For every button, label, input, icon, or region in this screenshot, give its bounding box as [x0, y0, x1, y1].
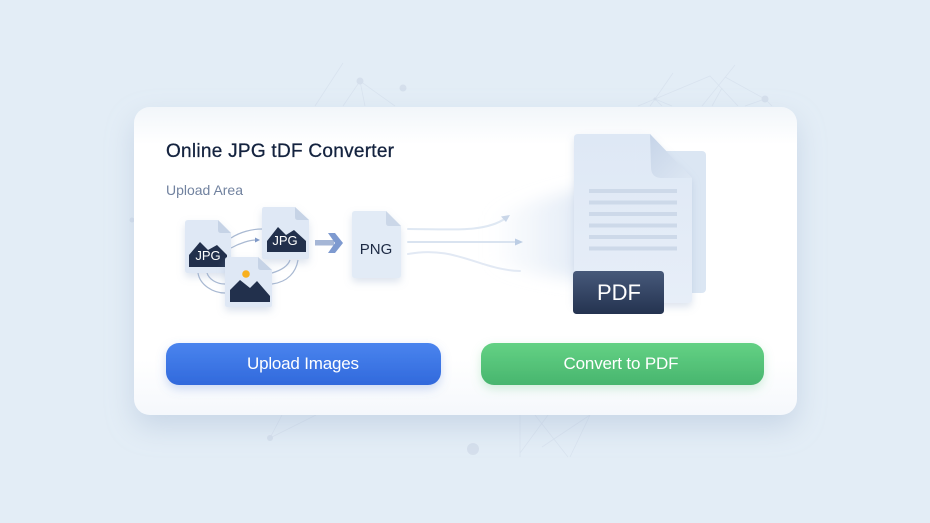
icon: PNG file [352, 211, 401, 278]
button: convert to PDF: Convert to PDF [564, 354, 678, 373]
button: upload images [166, 343, 441, 385]
front page [574, 134, 692, 303]
back page [600, 151, 706, 293]
glow beam [490, 188, 590, 280]
PDF badge [573, 271, 664, 314]
icon: JPG file right [262, 207, 309, 259]
title: Online JPG tDF Converter [166, 141, 395, 162]
icon: JPG file left [185, 220, 231, 273]
text lines [589, 189, 677, 250]
panel: converter card [134, 107, 797, 415]
icon: PDF document [573, 134, 706, 314]
network background [130, 63, 772, 457]
icon: JPG file left: JPG [195, 248, 221, 263]
icon: JPG file right: JPG [272, 233, 298, 248]
upload area label: Upload Area [166, 182, 243, 198]
button: upload images: Upload Images [247, 354, 359, 373]
page fold [650, 134, 692, 178]
flow arrows [408, 215, 523, 271]
icon: PNG file: PNG [360, 241, 392, 258]
button: convert to PDF [481, 343, 764, 385]
arrow: to PNG [315, 233, 343, 253]
connector curves [198, 229, 298, 293]
PDF badge: PDF [597, 280, 641, 305]
icon: image file [225, 257, 272, 307]
